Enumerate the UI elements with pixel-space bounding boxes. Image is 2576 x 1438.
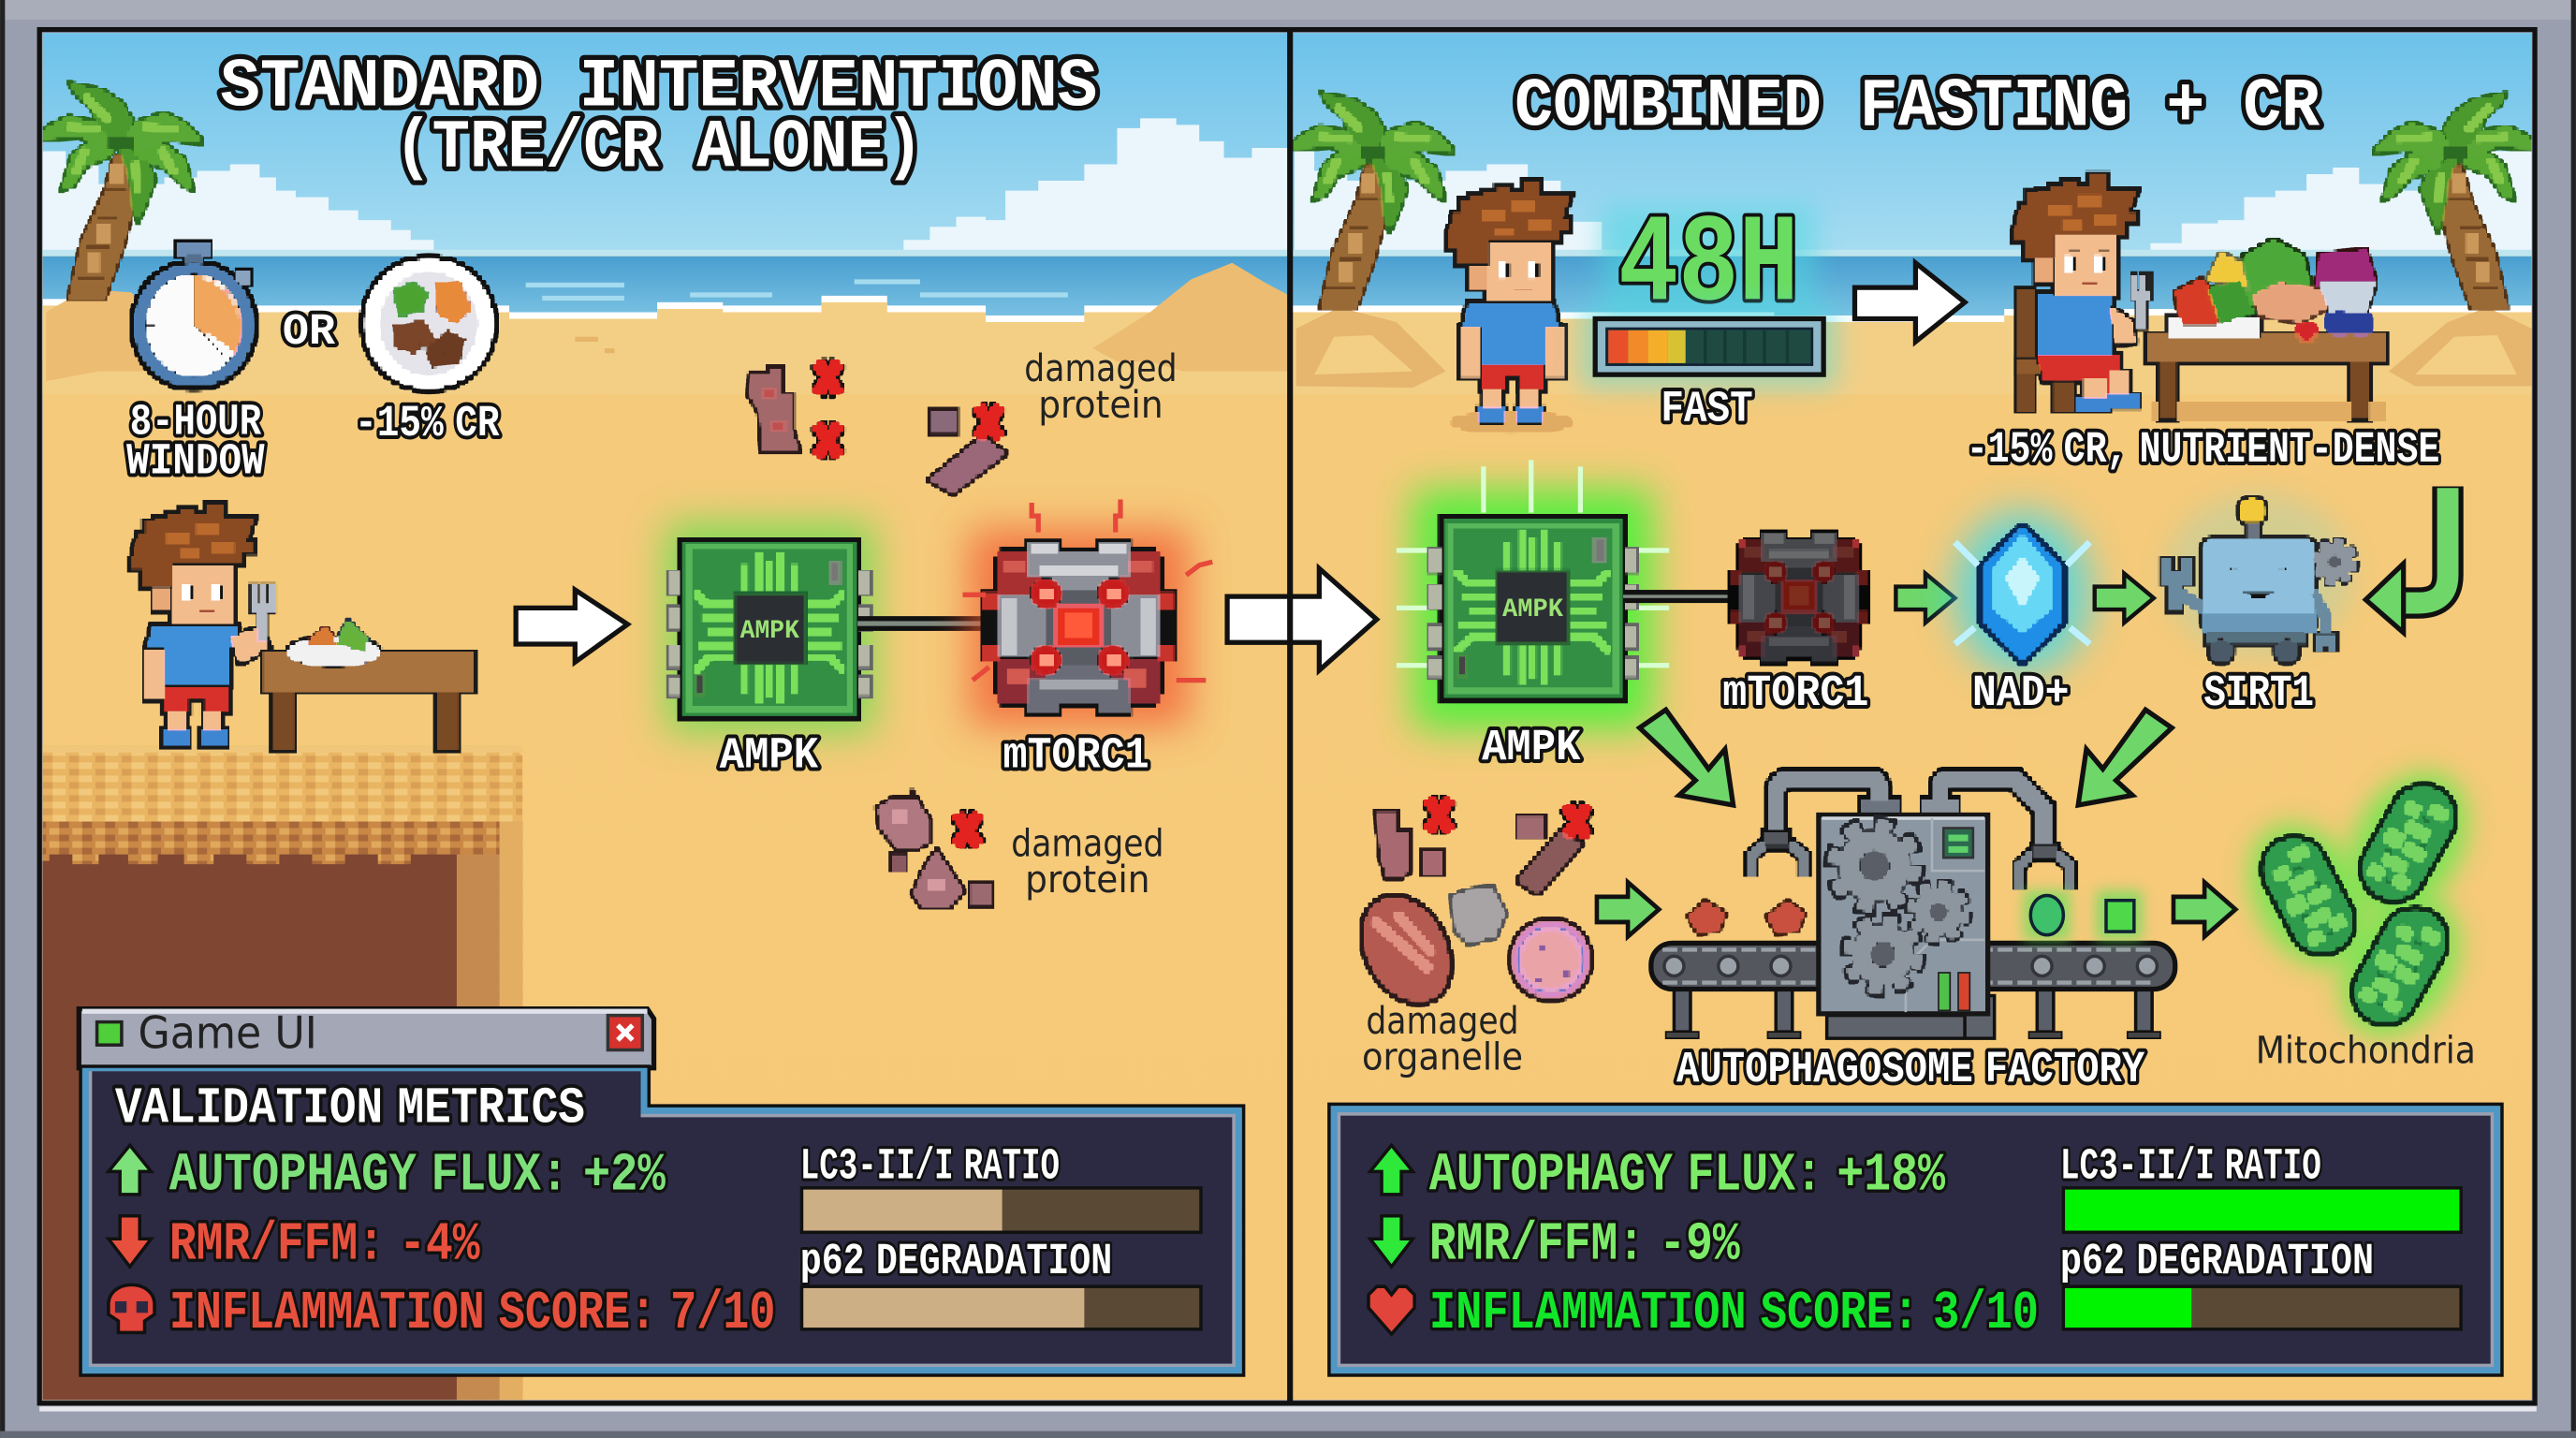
bar: p62 degradation right: [2060, 1238, 2461, 1329]
bar: LC3-II/I ratio right: [2060, 1142, 2461, 1232]
label: SIRT1: SIRT1: [2203, 669, 2314, 719]
large arrow between panels: [1227, 568, 1377, 670]
beach background left: [39, 30, 1290, 1410]
icon: palm tree left: [1295, 94, 1453, 309]
metrics panel body right: [1327, 1103, 2504, 1377]
arrow: NAD to SIRT1: [2095, 574, 2154, 623]
icon: palm tree: [43, 84, 200, 299]
label: autophagosome factory: AUTOPHAGOSOME FACTORY: [1676, 1046, 2145, 1095]
label: or: OR: [283, 308, 336, 358]
label: damaged organelle: damaged: [1366, 999, 1519, 1043]
panel: combined fasting plus CR: [1227, 30, 2539, 1410]
bar: p62 degradation: p62 DEGRADATION: [800, 1238, 1112, 1287]
panel: combined metrics: [1327, 1103, 2504, 1377]
arrow: SIRT1 to factory: [2078, 710, 2172, 805]
arrow: to AMPK: [516, 590, 627, 662]
table with plate: [263, 621, 475, 749]
bar: p62 degradation: [800, 1238, 1201, 1329]
title: standard interventions: [220, 49, 1097, 187]
title: combined fasting plus CR: COMBINED FASTING + CR: [1515, 68, 2320, 146]
label: 8-hour window: WINDOW: [126, 437, 265, 487]
mTORC1 complex: [963, 500, 1212, 726]
label: damaged protein bottom: [1013, 828, 1161, 901]
cliff: [39, 746, 522, 1413]
metric: autophagy flux: AUTOPHAGY FLUX: +2%: [169, 1146, 666, 1207]
icon: damaged protein fragments bottom: [877, 795, 990, 907]
metric: inflammation score right: INFLAMMATION SCORE: 3/10: [1429, 1284, 2039, 1344]
beach background right: [1290, 30, 2539, 1410]
character seated with chair: [2014, 174, 2150, 411]
label: 8-hour window: [126, 398, 265, 487]
character standing: [1447, 181, 1571, 433]
belt items: [1689, 890, 2143, 940]
metric: RMR/FFM right: RMR/FFM: -9%: [1429, 1214, 1740, 1275]
factory pipes and claws: [1751, 779, 2070, 888]
arrow: fast to refeed: [1854, 263, 1965, 342]
label: damaged protein: [1026, 352, 1174, 425]
label: mTORC1 right: mTORC1: [1722, 669, 1868, 719]
label: mitochondria: Mitochondria: [2256, 1029, 2476, 1073]
bar: LC3-II/I ratio right: LC3-II/I RATIO: [2060, 1142, 2321, 1192]
AMPK chip: [666, 522, 874, 733]
arrow: AMPK to factory: [1640, 710, 1734, 805]
label: 8-hour window: 8-HOUR: [130, 398, 262, 448]
icon: damaged protein fragments top: [749, 363, 1005, 493]
panel: standard interventions: [39, 30, 1290, 1413]
icon: plate with steak and vegetables: [363, 258, 494, 389]
label: fast: FAST: [1661, 385, 1753, 434]
mTORC1 complex inhibited: [1730, 532, 1868, 665]
bar: p62 degradation right: p62 DEGRADATION: [2060, 1238, 2374, 1287]
label: minus 15 percent CR: -15% CR: [355, 400, 500, 449]
title: standard interventions: STANDARD INTERVENTIONS: [220, 49, 1097, 126]
heading: validation metrics: VALIDATION METRICS: [115, 1081, 585, 1138]
fasting progress bar: [1580, 305, 1837, 388]
label: NAD+: NAD+: [1972, 669, 2070, 719]
arrow: debris to factory: [1597, 882, 1659, 936]
label: damaged organelle: [1362, 999, 1523, 1079]
icon: SIRT1 robot: [2162, 493, 2354, 662]
metrics panel body: [79, 1064, 1245, 1377]
bar: LC3-II/I ratio: LC3-II/I RATIO: [800, 1142, 1060, 1192]
connector: AMPK to mTORC1: [857, 616, 989, 631]
label: mTORC1 left: mTORC1: [1003, 732, 1149, 782]
table with nutrient-dense food: [2147, 240, 2385, 419]
title: standard interventions: (TRE/CR ALONE): [394, 110, 923, 187]
label: minus 15 percent CR nutrient dense: -15% CR, NUTRIENT-DENSE: [1967, 426, 2439, 476]
icon: palm tree right: [2376, 94, 2533, 309]
label: damaged protein bottom: protein: [1025, 858, 1150, 902]
metric: autophagy flux right: AUTOPHAGY FLUX: +18%: [1429, 1146, 1945, 1207]
icon: healthy mitochondria: [2226, 751, 2492, 1058]
character eating with fork: [131, 503, 274, 746]
factory machine with gears: [1819, 814, 1995, 1038]
label: damaged organelle: organelle: [1362, 1035, 1523, 1079]
label: damaged protein: protein: [1038, 383, 1164, 427]
connector: AMPK to mTORC1 right: [1623, 590, 1734, 603]
window title bar: [79, 1008, 654, 1068]
icon: NAD crystal: [1954, 511, 2091, 675]
window title bar: Game UI: [138, 1008, 317, 1060]
icon: damaged protein and organelle pile: [1345, 800, 1590, 1018]
panel: game UI window with validation metrics: [79, 1008, 1245, 1377]
AMPK chip activated: [1397, 460, 1669, 729]
label: 48H timer: 48H: [1618, 196, 1799, 337]
metric: inflammation score: INFLAMMATION SCORE: 7/10: [169, 1284, 775, 1344]
label: AMPK left: AMPK: [720, 732, 819, 782]
icon: stopwatch: [133, 243, 255, 388]
arrow: curved green feedback: [2365, 486, 2448, 633]
label: damaged protein bottom: damaged: [1011, 821, 1164, 865]
bar: LC3-II/I ratio: [800, 1142, 1201, 1232]
autophagosome factory: [1651, 779, 2175, 1038]
conveyor belt: [1651, 943, 2175, 1038]
label: AMPK right: AMPK: [1482, 724, 1581, 773]
label: damaged protein: damaged: [1024, 346, 1178, 390]
arrow: factory to mitochondria: [2174, 882, 2235, 936]
metric: RMR/FFM: RMR/FFM: -4%: [169, 1214, 480, 1275]
AMPK chip activated: AMPK: [1502, 595, 1563, 624]
AMPK chip: AMPK: [740, 617, 799, 646]
arrow: mTORC1 to NAD: [1895, 574, 1955, 623]
